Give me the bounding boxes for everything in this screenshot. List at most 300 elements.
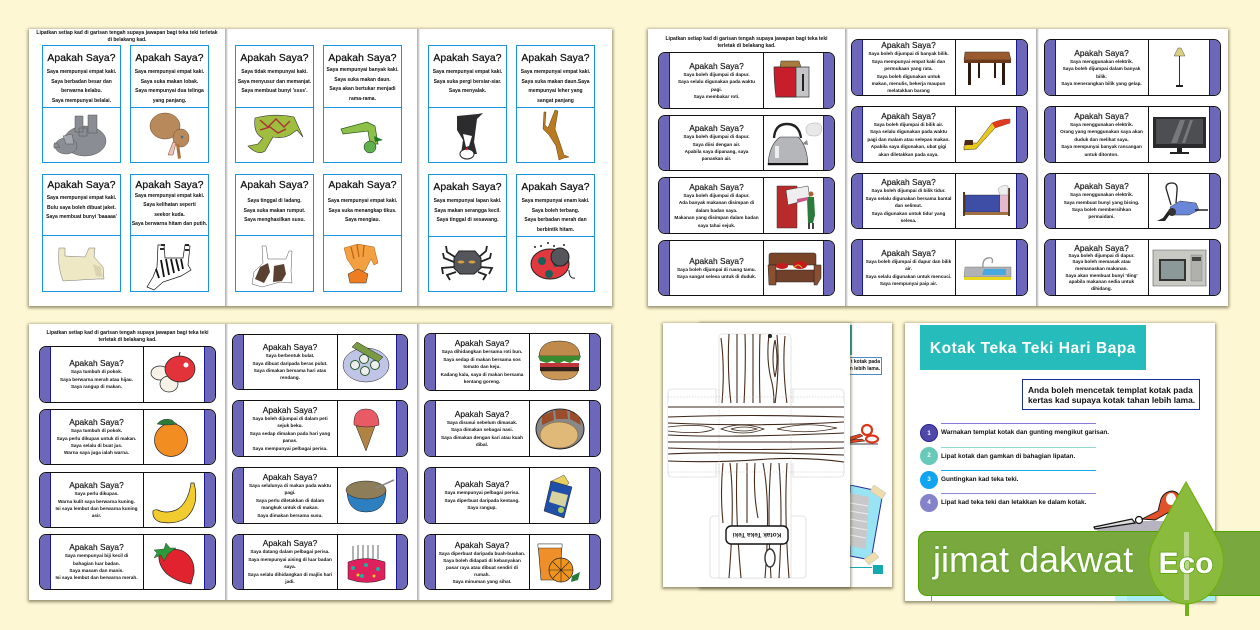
card: sheep: Saya membuat bunyi 'baaaaa'	[46, 214, 117, 220]
card: cow	[235, 174, 314, 292]
card: orange: Saya selalu di buat jus.	[71, 443, 122, 448]
icon: rabbit	[150, 112, 190, 159]
card: toothbrush: akan diletakkan pada saya.	[878, 152, 939, 157]
card: elephant: berwarna kelabu.	[61, 88, 102, 94]
card: dog: Saya menyalak.	[449, 88, 486, 94]
card: cat: Saya mengiau.	[345, 217, 380, 223]
card: banana: Isi saya lembut dan berwarna kuning	[55, 506, 138, 511]
step 3	[920, 470, 1110, 490]
eco banner	[918, 531, 1260, 596]
card: snake: Saya tidak mempunyai kaki.	[241, 69, 308, 75]
card: rice meal plate: Apakah Saya?	[455, 409, 509, 419]
card: television: Saya menggunakan elektrik.	[1070, 122, 1133, 127]
card: sink: Saya selalu digunakan untuk mencuci.	[866, 274, 951, 278]
footer line	[850, 567, 872, 568]
panel: instruction page	[905, 323, 1215, 601]
card: table: Saya mempunyai empat kaki dan	[872, 59, 945, 64]
card: rice meal plate: Saya disusui sebelum dimasak.	[447, 420, 517, 425]
card: bed: Saya boleh dijumpai di bilik tidur.	[871, 188, 946, 193]
step 2: Lipat kotak dan gamkan di bahagian lipatan.	[941, 453, 1075, 460]
label: Kotak Teka Teki: Kotak Teka Teki	[733, 531, 781, 538]
text box: hidden print note: n lebih lama.	[850, 366, 880, 372]
icon: rice dumplings	[342, 342, 390, 382]
card: zebra: Saya kelihatan seperti	[143, 202, 196, 208]
card: kettle: Apabila saya dipanang, saya	[685, 149, 748, 154]
card: vacuum cleaner: Saya menggunakan elektrik.	[1070, 192, 1133, 197]
icon: vacuum cleaner	[1157, 182, 1208, 221]
icon: fridge	[776, 186, 815, 229]
card: spider: Saya tinggal di sesawang.	[437, 217, 498, 223]
vertical grain	[721, 334, 789, 578]
card: sheep: Saya mempunyai empat kaki.	[47, 195, 116, 201]
card: vacuum cleaner	[1044, 173, 1221, 229]
title banner	[920, 325, 1146, 370]
card: cereal: Saya dimakan bersama susu.	[257, 513, 323, 518]
card: table: Apakah Saya?	[881, 40, 936, 50]
card: ladybird: Saya mempunyai enam kaki.	[522, 198, 589, 204]
icon: scissors	[1090, 488, 1190, 534]
card: cat: Apakah Saya?	[328, 180, 397, 191]
icon: cereal	[346, 479, 394, 512]
card: elephant: Apakah Saya?	[47, 53, 116, 64]
card: crisps: Saya diperbuat daripada kentang.	[444, 498, 520, 503]
card: spider: Saya makan serangga kecil.	[434, 208, 501, 214]
eco banner: jimat dakwat	[933, 539, 1133, 580]
card: vacuum cleaner: permaidani.	[1088, 214, 1115, 219]
image: book cube partial	[850, 485, 886, 566]
card: sheep: Bulu saya boleh dibuat jaket.	[47, 205, 116, 211]
card: giraffe: Saya mempunyai empat kaki.	[521, 69, 590, 75]
step 3: 3	[927, 477, 931, 483]
card: burger: Saya sedap di makan bersama sos	[443, 357, 521, 362]
card: ice cream	[232, 400, 408, 457]
card: rabbit: Saya mempunyai empat kaki.	[135, 69, 204, 75]
card: bed: Saya selalu digunakan bersama bantal	[866, 196, 951, 201]
note box: kertas kad supaya kotak tahan lebih lama.	[1028, 395, 1195, 405]
icon: dog	[457, 113, 483, 160]
icon: toothbrush	[964, 118, 1010, 150]
card: toothbrush: Apakah Saya?	[881, 111, 936, 121]
icon: toaster	[774, 60, 810, 98]
text box: hidden print note: t kotak pada	[851, 359, 880, 365]
peek: light blue strip	[1127, 596, 1215, 601]
card: fridge: Apakah Saya?	[689, 182, 744, 192]
card: toothbrush: pagi dan malam atau selepas makan.	[867, 137, 950, 142]
card: spider: Apakah Saya?	[433, 182, 502, 193]
card: fridge	[658, 177, 835, 234]
card: birthday cake: Saya mempunyai aising di luar badan	[248, 557, 332, 562]
card: cereal: mangkuk untuk di makan.	[261, 505, 319, 510]
card: rice dumplings: Apakah Saya?	[263, 342, 317, 352]
card: rabbit: Saya mempunyai dua telinga	[135, 88, 204, 94]
card: kettle	[658, 115, 835, 171]
card: banana	[39, 472, 216, 528]
card: dog: Saya mempunyai empat kaki.	[433, 69, 502, 75]
card: ladybird: berbintik hitam.	[537, 227, 574, 233]
card: rabbit: Saya suka makan lobak.	[141, 79, 198, 85]
card: elephant: Saya berbadan besar dan	[51, 79, 112, 85]
card: toaster: Saya selalu digunakan pada waktu	[678, 79, 755, 84]
card: dog	[428, 45, 507, 163]
card: rice dumplings	[232, 334, 408, 390]
instruction: household sheet: Lipatkan setiap kad di garisan tengah supaya jawapan bagi teka teki terletak di belakang kad.	[666, 36, 828, 49]
card: television	[1044, 106, 1221, 163]
card: cow: Saya suka makan rumput.	[244, 208, 305, 214]
card: table: Saya boleh digunakan untuk	[877, 74, 940, 78]
card: dog: Apakah Saya?	[433, 53, 502, 64]
card: sink: Apakah Saya?	[881, 248, 936, 258]
card: burger: kentang goreng.	[464, 379, 500, 384]
icon: banana	[152, 482, 196, 524]
icon: cat	[344, 244, 378, 284]
icon: sink	[964, 257, 1012, 280]
card: orange juice: Apakah Saya?	[455, 540, 509, 550]
card: lamp	[1044, 39, 1221, 96]
card: bed: Saya digunakan untuk tidur yang	[872, 211, 945, 216]
card: table: Saya boleh dijumpai di banyak bilik.	[868, 51, 949, 56]
card: birthday cake: Apakah Saya?	[263, 538, 317, 548]
card: sink: air.	[905, 266, 912, 271]
icon: small logo	[765, 549, 775, 567]
card: burger: Apakah Saya?	[455, 338, 509, 348]
card: apple: Apakah Saya?	[69, 358, 124, 368]
card: toothbrush: Apabila saya digunakan, ubat gigi	[871, 144, 946, 149]
horizontal grain	[668, 403, 844, 463]
card: birthday cake: Saya datang dalam pelbagai perisa.	[250, 549, 330, 554]
note box: Anda boleh mencetak templat kotak pada	[1028, 385, 1193, 395]
icon: bed	[963, 185, 1010, 216]
card: toaster	[658, 52, 835, 109]
card: microwave: Saya boleh memasak atau	[1072, 259, 1131, 264]
icon: sofa	[768, 252, 822, 286]
icon: scissors partial	[850, 424, 880, 445]
card: cat	[323, 174, 402, 292]
card: vacuum cleaner: Saya membuat bunyi yang bising.	[1064, 200, 1139, 205]
icon: lamp	[1174, 48, 1186, 87]
card: rice meal plate	[424, 400, 601, 457]
card: orange juice: rumah.	[474, 572, 490, 576]
card: television: untuk ditonton.	[1084, 152, 1119, 157]
card: bed: dan selimut.	[895, 203, 922, 208]
card: sheep	[42, 174, 121, 292]
step 2: 2	[927, 453, 931, 459]
card: fridge: Ada banyak makanan disimpan di	[679, 200, 754, 205]
step 1: Warnakan templat kotak dan gunting mengikut garisan.	[941, 429, 1109, 436]
card: toothbrush: Saya boleh dijumpai di bilik air.	[874, 122, 943, 127]
card: zebra: Saya berwarna hitam dan putih.	[132, 221, 207, 227]
note box	[1022, 379, 1200, 410]
card: rabbit: Apakah Saya?	[135, 53, 204, 64]
card: caterpillar: Saya mempunyai banyak kaki.	[326, 67, 398, 73]
peek: colour strip under banner	[927, 596, 1127, 601]
icon: crisps	[544, 474, 572, 518]
card: kettle: Apakah Saya?	[689, 123, 744, 133]
card: apple: Saya berwarna merah atau hijau.	[60, 377, 133, 382]
card: orange juice: pasar raya atau dibuat sendiri di	[446, 564, 518, 570]
card: microwave: memanaskan makanan.	[1075, 266, 1128, 271]
icon: rice meal plate	[536, 408, 584, 450]
card: banana: Warna kulit saya berwarna kuning.	[58, 499, 135, 504]
card: rice meal plate: Saya dimakan dengan kari atau kuah	[441, 434, 523, 440]
card: birthday cake	[232, 534, 408, 590]
card: table: melatakkan barang	[887, 88, 930, 93]
panel: household riddle cards sheet	[648, 29, 1228, 306]
card: vacuum cleaner: Saya boleh membersihkan	[1072, 207, 1131, 212]
icon: television	[1153, 117, 1206, 154]
card: lamp: Saya menggunakan elektrik.	[1070, 59, 1133, 64]
card: spider	[428, 174, 507, 292]
step 1	[920, 423, 1109, 442]
card: birthday cake: jadi.	[285, 579, 295, 584]
card: bed	[851, 173, 1028, 229]
card: bed: selesa.	[901, 218, 916, 223]
icon: cow	[252, 246, 292, 288]
card: sink: Saya boleh dijumpai di dapur dan bilik	[866, 259, 951, 264]
card: zebra	[130, 174, 209, 292]
card: microwave: Saya akan membuat bunyi 'ding'	[1065, 272, 1138, 278]
icon: kettle	[768, 122, 822, 166]
card: rice meal plate: dibal.	[476, 442, 488, 447]
card: cat: Saya mempunyai empat kaki.	[328, 198, 397, 204]
card: orange juice	[424, 534, 601, 590]
card: apple: Saya rangup di makan.	[71, 384, 122, 389]
card: zebra: seekor kuda.	[154, 212, 185, 218]
card: sofa	[658, 240, 835, 296]
card: orange juice: Saya minuman yang sihat.	[453, 578, 511, 584]
icon: giraffe	[542, 110, 569, 160]
card: caterpillar: rama-rama.	[349, 96, 376, 102]
card: microwave: dihidang.	[1091, 286, 1112, 291]
icon: birthday cake	[348, 545, 386, 583]
card: television: Saya mempunyai banyak rancangan	[1061, 144, 1142, 149]
card: toaster: pagi.	[711, 86, 722, 92]
icon: caterpillar	[340, 122, 383, 154]
teal header edge	[850, 325, 852, 355]
card: cereal: Saya selalunya di makan pada waktu	[249, 483, 331, 488]
card: ice cream: Saya sedap dimakan pada hari yang	[250, 431, 330, 436]
card: orange juice: Saya diperbuat daripada buah-buahan.	[439, 550, 525, 556]
card: kettle: Saya diisi dengan air.	[693, 142, 740, 147]
card: rabbit: yang panjang.	[153, 98, 186, 104]
card: banana: asir.	[92, 513, 101, 518]
card: snake: Apakah Saya?	[240, 53, 309, 64]
card: lamp: Apakah Saya?	[1074, 48, 1129, 58]
card: ice cream: Apakah Saya?	[263, 405, 317, 415]
card: cow: Apakah Saya?	[240, 180, 309, 191]
card: ice cream: Saya mempunyai pelbagai perisa.	[252, 446, 328, 451]
card: toothbrush	[851, 106, 1028, 163]
card: fridge: Saya boleh dijumpai di dapur.	[683, 193, 750, 198]
card: orange	[39, 409, 216, 465]
card: television: duduk dan melihat saya.	[1074, 137, 1129, 142]
card: snake: Saya membuat bunyi 'ssss'.	[241, 88, 308, 94]
card: toaster: Apakah Saya?	[689, 61, 744, 71]
card: strawberry: Saya mempunyai biji kecil di	[65, 553, 128, 558]
card: orange juice: Saya boleh didapati di kebanyakan	[443, 558, 521, 562]
icon: ladybird	[530, 242, 576, 280]
card: burger: Kadang kala, saya di makan bersama	[441, 372, 523, 377]
card: microwave: Apakah Saya?	[1074, 243, 1129, 253]
panel: wood box template	[663, 323, 850, 587]
card: strawberry	[39, 534, 216, 590]
card: kettle: panaskan air.	[702, 156, 731, 161]
card: giraffe: sangat panjang	[537, 98, 574, 104]
card: ladybird: Saya berbadan merah dan	[524, 217, 587, 223]
card: rice dumplings: Saya berbentuk bulat.	[266, 353, 314, 358]
card: ice cream: panas.	[283, 438, 297, 443]
card: orange: Apakah Saya?	[69, 417, 124, 427]
card: elephant	[42, 45, 121, 163]
card: snake	[235, 45, 314, 163]
card: kettle: Saya boleh dijumpai di dapur.	[683, 134, 750, 139]
card: rabbit	[130, 45, 209, 163]
icon: zebra	[146, 244, 192, 290]
card: sofa: Apakah Saya?	[689, 256, 744, 266]
card: ice cream: sejuk beku.	[277, 423, 303, 428]
card: zebra: Saya mempunyai empat kaki.	[135, 193, 204, 199]
instruction: food sheet: Lipatkan setiap kad di garisan tengah supaya jawapan bagi teka teki terletak di belakang kad.	[46, 330, 208, 343]
card: dog: Saya suka pergi bersiar-siar.	[434, 79, 501, 85]
step 1: 1	[927, 431, 931, 437]
card: caterpillar: Saya akan bertukar menjadi	[329, 86, 396, 92]
icon: burger	[538, 340, 581, 380]
card: fridge: dalam badan saya.	[696, 208, 737, 213]
icon: elephant	[54, 114, 106, 156]
card: orange: Warna saya juga ialah warna.	[64, 450, 129, 455]
card: spider: Saya mempunyai lapan kaki.	[434, 198, 501, 204]
title banner: Kotak Teka Teki Hari Bapa	[930, 340, 1136, 357]
icon: spider	[441, 246, 494, 280]
card: television: Apakah Saya?	[1074, 111, 1129, 121]
card: rice dumplings: Saya dimakan bersama hari atas	[254, 368, 326, 373]
card: rice meal plate: Saya dimakan sebagai nasi.	[451, 427, 513, 432]
icon: sheep	[58, 248, 104, 282]
card: birthday cake: saya.	[284, 564, 296, 569]
card: giraffe: Saya suka makan daun.Saya	[521, 79, 590, 85]
card: sink	[851, 239, 1028, 296]
icon: microwave	[1152, 250, 1206, 286]
step 4: 4	[927, 500, 931, 506]
card: lamp: bilik.	[1096, 74, 1107, 78]
panel: animal riddle cards sheet	[29, 29, 612, 306]
flaps	[668, 389, 844, 578]
icon: snake	[248, 114, 304, 153]
instruction: animal sheet: Lipatkan setiap kad di garisan tengah supaya jawapan bagi teka teki terletak di belakang kad.	[36, 30, 218, 43]
card: sink: Saya mempunyai paip air.	[880, 281, 937, 286]
card: table: makan, menulis, bekerja maupun	[872, 81, 945, 86]
card: rice dumplings: Saya dibuat daripada beras pulut.	[252, 361, 328, 366]
card: cereal: Apakah Saya?	[263, 472, 317, 482]
step 2	[920, 446, 1110, 466]
step 4: Lipat kad teka teki dan letakkan ke dalam kotak.	[941, 499, 1086, 506]
card: burger: Saya dihidangkan bersama roti bun.	[442, 349, 522, 354]
card: ladybird	[516, 174, 595, 292]
card: toaster: Saya membakar roti.	[694, 94, 739, 99]
card: zebra: Apakah Saya?	[135, 180, 204, 191]
card: giraffe	[516, 45, 595, 163]
card: lamp: Saya menerangkan bilik yang gelap.	[1061, 81, 1142, 86]
text: Eco: Eco	[1158, 547, 1214, 580]
card: fridge: saya tahai sejuk.	[698, 223, 735, 228]
card: crisps: Apakah Saya?	[455, 479, 509, 489]
card: microwave: apabila makanan sedia untuk	[1069, 279, 1134, 284]
icon: table	[964, 52, 1012, 85]
card: orange: Saya tumbuh di pokok.	[71, 428, 122, 433]
panel: instruction page behind wood template	[700, 323, 892, 587]
text box: hidden print note	[846, 357, 882, 375]
card: crisps	[424, 467, 601, 524]
icon: eco leaf	[1140, 478, 1232, 620]
card: cereal	[232, 467, 408, 524]
card: snake: Saya menyusur dan memanjat.	[238, 79, 311, 85]
card: strawberry: Isi saya lembut dan berwarna merah.	[55, 575, 138, 580]
panel: food riddle cards sheet	[29, 324, 611, 600]
card: banana: Saya perlu dikupas.	[74, 491, 119, 496]
card: microwave	[1044, 239, 1221, 296]
step 4	[920, 493, 1110, 513]
card: elephant: Saya mempunyai empat kaki.	[47, 69, 116, 75]
card: burger: tomato dan keju.	[463, 364, 501, 369]
card: strawberry: Saya masam dan manis.	[69, 568, 124, 573]
card: caterpillar	[323, 45, 402, 163]
card: crisps: Saya mempunyai pelbagai perisa.	[444, 490, 520, 495]
card: table: permukaan yang rata.	[884, 66, 933, 71]
card: ladybird: Apakah Saya?	[521, 182, 590, 193]
card: banana: Apakah Saya?	[69, 480, 124, 490]
card: caterpillar: Saya suka makan daun.	[334, 77, 391, 83]
card: sofa: Saya boleh dijumpai di ruang tamu.	[677, 267, 756, 272]
card: cereal: pagi.	[285, 490, 295, 495]
step 3: Guntingkan kad teka teki.	[941, 476, 1018, 483]
card: cereal: Saya perlu diletakkan di dalam	[256, 498, 324, 503]
card: cat: Saya suka menangkap tikus.	[328, 208, 397, 214]
card: rice dumplings: rendang.	[280, 375, 300, 380]
card: lamp: Saya boleh dijumpai dalam banyak	[1063, 66, 1140, 71]
card: bed: Apakah Saya?	[881, 177, 936, 187]
icon: strawberry	[154, 543, 194, 584]
card: cow: Saya menghasilkan susu.	[244, 217, 305, 223]
footer logo	[873, 565, 883, 574]
icon: orange juice	[538, 544, 580, 582]
card: cow: Saya tinggal di ladang.	[247, 198, 302, 204]
card: strawberry: Apakah Saya?	[69, 542, 124, 552]
card: burger	[424, 333, 601, 391]
card: microwave: Saya boleh dijumpai di dapur.	[1068, 253, 1135, 258]
template: wood box net	[668, 334, 844, 578]
card: birthday cake: Saya selalu dihidangkan di majlis hari	[248, 572, 332, 577]
card: vacuum cleaner: Apakah Saya?	[1074, 181, 1129, 191]
card: strawberry: bahagian luar badan.	[73, 561, 120, 566]
card: giraffe: mempunyai leher yang	[528, 88, 583, 94]
card: television: Orang yang menggunakan saya akan	[1060, 129, 1143, 134]
card: caterpillar: Apakah Saya?	[328, 53, 397, 64]
icon: apple	[150, 352, 196, 392]
card: fridge: Makanan yang disimpan dalam badan	[674, 215, 759, 220]
card: sheep: Apakah Saya?	[47, 180, 116, 191]
card: sofa: Saya sangat selesa untuk di duduk.	[677, 274, 756, 279]
card: apple: Saya tumbuh di pokok.	[71, 369, 122, 374]
card: giraffe: Apakah Saya?	[521, 53, 590, 64]
icon: orange	[154, 418, 188, 457]
card: ladybird: Saya boleh terbang.	[532, 208, 579, 214]
card: toaster: Saya boleh dijumpai di dapur.	[683, 72, 750, 77]
card: apple	[39, 346, 216, 403]
card: orange: Saya perlu dikupas untuk di makan.	[57, 436, 136, 441]
card: ice cream: Saya boleh dijumpai di dalam peti	[252, 416, 328, 421]
card: crisps: Saya rangup.	[467, 505, 497, 510]
icon: ice cream	[354, 408, 380, 451]
card: table	[851, 39, 1028, 96]
